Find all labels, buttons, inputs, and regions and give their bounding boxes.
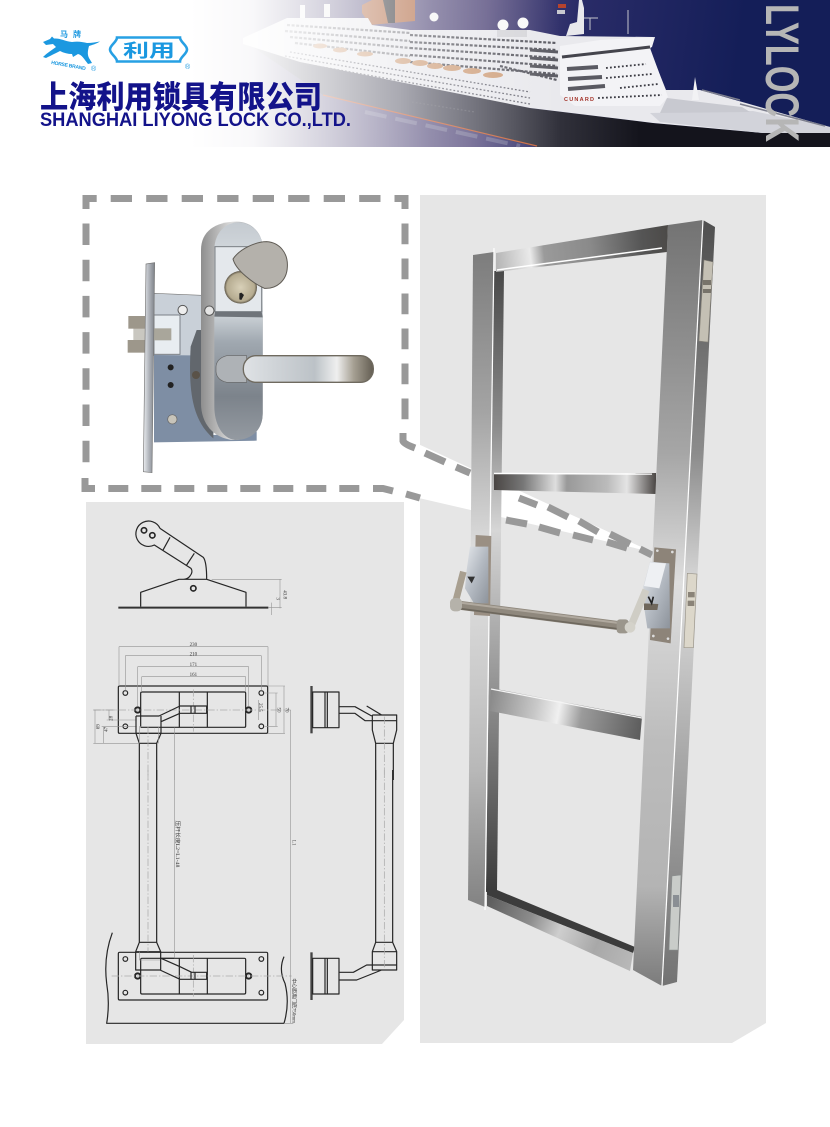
- logo: liyong badge: [110, 38, 191, 71]
- panel: technical drawing background: [86, 502, 404, 1044]
- plan view of bracket: 69: [96, 724, 101, 729]
- door bottom rail: [487, 890, 635, 971]
- mortise case: [154, 293, 257, 442]
- technical drawing upper: [93, 521, 397, 780]
- logo: liyong badge: ®: [185, 63, 191, 71]
- left lock body: [465, 547, 488, 603]
- door middle rail upper: [494, 473, 656, 494]
- faceplate: [143, 263, 155, 473]
- thumb cover: [233, 242, 287, 288]
- logo: horse brand: ®: [91, 65, 97, 73]
- logo: horse brand: 马牌: [60, 29, 81, 39]
- door inner left jamb: [486, 271, 504, 892]
- door outline: [106, 933, 287, 1023]
- door left stile: [468, 248, 494, 910]
- plan view of bracket: 70: [284, 708, 289, 713]
- right lock body: [643, 562, 670, 628]
- callout wedge to panic bar: [380, 437, 652, 552]
- side view of bracket: 43.8: [282, 590, 287, 600]
- door middle rail lower: [490, 688, 642, 740]
- right link arm: [625, 590, 646, 633]
- plan view of bracket: 47: [105, 726, 110, 732]
- white fade: [0, 0, 830, 147]
- right mounting plate: [650, 547, 676, 643]
- left latch detail: [467, 577, 475, 583]
- side wordmark: LYLOCK: [756, 4, 809, 142]
- plan view of bracket: 161: [190, 673, 198, 678]
- plan view of bracket: 28: [110, 715, 115, 721]
- right elevation lower: [310, 770, 397, 1000]
- left mounting plate: [474, 535, 491, 616]
- lower handle arm: [136, 770, 207, 979]
- plan view of bracket: [93, 643, 292, 780]
- ship decks: [243, 18, 830, 133]
- plan view of bracket: 230: [190, 643, 198, 648]
- lock photo: [128, 222, 373, 473]
- lower plan view: [112, 952, 292, 1000]
- ship hull: [250, 45, 830, 147]
- logo: horse brand: HORSE BRAND: [51, 60, 87, 72]
- left arm: [456, 572, 463, 600]
- ship photo: [190, 0, 830, 147]
- ship mast and flags: [557, 0, 628, 36]
- upper handle arm: [136, 706, 207, 780]
- ship bow deck: [650, 77, 830, 133]
- panel: door background: [420, 195, 766, 1043]
- latch plate top: [699, 260, 713, 342]
- header banner: [0, 0, 830, 147]
- escutcheon: [192, 222, 263, 440]
- side view of bracket: [118, 521, 287, 615]
- bar left end: [450, 598, 462, 611]
- lock bolts: [128, 316, 172, 353]
- ship bridge: CUNARD: [564, 97, 594, 103]
- dimension lines and notes: 压杆长度L2=L1-48: [174, 821, 181, 868]
- company name chinese: 上海利用锁具有限公司: [40, 80, 322, 115]
- lever handle: [216, 356, 373, 382]
- ship lifeboats: [313, 44, 503, 78]
- door top rail: [496, 225, 668, 272]
- callout: dashed frame: [85, 198, 652, 555]
- latch plate bottom: [669, 875, 681, 950]
- right elevation upper: [310, 686, 397, 780]
- logo: horse brand: [43, 29, 100, 73]
- bar right end: [617, 619, 629, 633]
- door right stile: [633, 220, 715, 986]
- panic bar: [450, 535, 697, 648]
- door frame: [468, 220, 715, 986]
- side view of bracket: 3: [275, 597, 280, 600]
- ship bridge: [530, 37, 668, 106]
- ship funnel: [362, 0, 415, 25]
- plan view of bracket: 171: [190, 663, 198, 668]
- door edge latch: [684, 573, 697, 648]
- logo: liyong badge: 利用: [123, 41, 175, 61]
- ship stacks and domes: [300, 4, 528, 37]
- ship cabin rows: [285, 25, 557, 104]
- push bar: [455, 602, 622, 629]
- dimension lines and notes: L1: [291, 840, 296, 846]
- dimension lines and notes: 中心距离门底750mm: [291, 978, 298, 1023]
- dimension lines and notes: [174, 770, 298, 1023]
- plan view of bracket: 210: [190, 652, 198, 657]
- plan view of bracket: 25.5: [257, 703, 262, 712]
- plan view of bracket: 50: [276, 708, 281, 713]
- company name english: SHANGHAI LIYONG LOCK CO.,LTD.: [40, 110, 351, 131]
- technical drawing lower: [106, 770, 397, 1023]
